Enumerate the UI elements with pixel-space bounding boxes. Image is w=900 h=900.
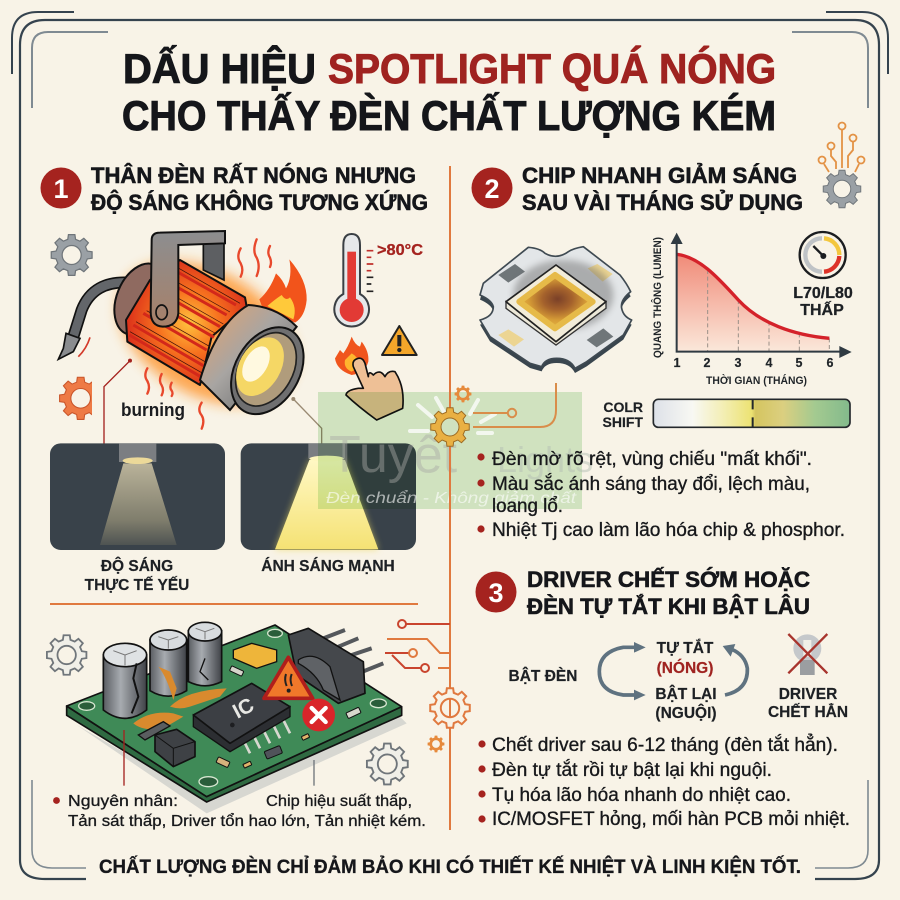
label: driver dead: CHẾT HẲN [768, 703, 848, 721]
heading 3: 3 [488, 578, 504, 608]
watermark: Lights [497, 439, 593, 480]
label: driver dead [768, 686, 848, 721]
title: DẤU HIỆU [123, 44, 316, 92]
bullets section 3 [478, 732, 850, 830]
icon: gray gear [51, 235, 92, 275]
bullets section 2: Màu sắc ánh sáng thay đổi, lệch màu, [492, 472, 810, 495]
heading 3: DRIVER CHẾT SỚM HOẶC [527, 567, 810, 592]
cycle labels [655, 639, 717, 722]
front arm [151, 231, 225, 327]
label: burning: burning [121, 400, 185, 420]
cycle labels: BẬT LẠI [655, 685, 717, 703]
icon: crossed bulb [788, 634, 827, 675]
bullets section 2: loang lổ. [492, 495, 563, 517]
small SMD parts [216, 666, 361, 768]
heading 2: CHIP NHANH GIẢM SÁNG [522, 163, 797, 188]
icon: gauge [800, 232, 846, 278]
heading 1: RẤT NÓNG [213, 163, 328, 188]
watermark [318, 392, 593, 509]
circuit traces [385, 620, 450, 672]
cycle diagram [509, 634, 848, 722]
bullets section 3: IC/MOSFET hỏng, mối hàn PCB mỏi nhiệt. [492, 808, 850, 830]
line chart: lumen decay [671, 233, 852, 358]
colour shift bar [653, 399, 850, 427]
cycle labels: TỰ TẮT [657, 639, 714, 657]
lamp cable [58, 282, 130, 359]
heat waves [145, 239, 271, 429]
label: weak brightness: THỰC TẾ YẾU [85, 577, 189, 594]
LED chip on star board [480, 247, 632, 373]
IC chip [193, 683, 290, 753]
panel: strong beam [241, 443, 416, 550]
vertical orange divider with circuit gears [431, 166, 556, 830]
title: SPOTLIGHT QUÁ NÓNG [328, 44, 776, 92]
flames [259, 259, 307, 323]
bullets section 2 [477, 448, 845, 541]
panel: section 3 driver failure [476, 567, 850, 830]
cause text: Chip hiệu suất thấp, [266, 793, 412, 810]
bullets section 3: Đèn tự tắt rồi tự bật lại khi nguội. [492, 758, 772, 781]
lamp illustration [50, 231, 417, 550]
label: weak brightness: ĐỘ SÁNG [101, 557, 173, 575]
icon: thermometer [334, 234, 373, 327]
connector block [288, 628, 383, 703]
chart axis labels: 3 [735, 356, 742, 370]
chip and chart illustrations [480, 232, 852, 427]
panel: section 1 lamp overheating [40, 163, 428, 594]
heading 1 [40, 163, 428, 215]
bullets section 3: Chết driver sau 6-12 tháng (đèn tắt hẳn). [492, 732, 838, 756]
chart axis labels [651, 237, 834, 387]
heading 2: 2 [484, 174, 500, 204]
horizontal divider [50, 603, 418, 605]
icon: hand touching flame [335, 337, 403, 420]
label: L70/L80 low [793, 285, 853, 319]
label: weak brightness [85, 557, 189, 594]
icon: red x badge [302, 699, 335, 731]
leader lines [104, 359, 322, 444]
chart axis labels: 4 [766, 356, 773, 370]
panel: weak beam [50, 443, 225, 550]
yellow component [233, 643, 277, 668]
icon: circuit gear top right [818, 122, 864, 208]
title [122, 44, 776, 139]
lamp lens [216, 314, 318, 427]
driver board illustration [47, 622, 408, 813]
heat sink fins [126, 260, 247, 385]
cause text [53, 793, 426, 830]
icon: left gear [47, 635, 86, 675]
watermark: Đèn chuẩn - Không giảm chất [326, 489, 577, 507]
chart axis labels: THỜI GIAN (THÁNG) [706, 374, 807, 387]
label: colour shift [603, 399, 643, 430]
heading 1: ĐỘ SÁNG KHÔNG TƯƠNG XỨNG [91, 190, 428, 215]
circuit board [67, 625, 407, 813]
cause text: Nguyên nhân: [68, 793, 178, 810]
cause text: Tản sát thấp, Driver tổn hao lớn, Tản nhiệt kém. [68, 813, 426, 830]
leaking capacitors [103, 622, 227, 729]
label: turn on: BẬT ĐÈN [509, 667, 577, 685]
label: strong light: ÁNH SÁNG MẠNH [261, 558, 395, 575]
chart axis labels: 5 [796, 356, 803, 370]
heading 3: ĐÈN TỰ TẮT KHI BẬT LÂU [527, 594, 810, 619]
heading 1: THÂN ĐÈN [91, 163, 205, 188]
icon: orange gear [60, 373, 105, 423]
icon: warning sign [264, 657, 313, 698]
bullets section 3: Tụ hóa lão hóa nhanh do nhiệt cao. [492, 784, 791, 806]
small inductor [138, 722, 195, 767]
icon: warning triangle [382, 326, 417, 355]
icon: outline gear and small gear [428, 688, 470, 752]
bullets section 2: Nhiệt Tj cao làm lão hóa chip & phosphor. [492, 519, 845, 541]
label: colour shift: COLR [603, 399, 643, 415]
leader lines [122, 730, 126, 786]
IC chip: IC [229, 693, 258, 723]
heading 1: 1 [53, 174, 69, 204]
label: L70/L80 low: L70/L80 [793, 285, 853, 302]
chart axis labels: 6 [827, 356, 834, 370]
heading 3 [476, 567, 810, 619]
footer conclusion: CHẤT LƯỢNG ĐÈN CHỈ ĐẢM BẢO KHI CÓ THIẾT KẾ NHIỆT VÀ LINH KIỆN TỐT. [99, 856, 801, 878]
heading 1: NHƯNG [335, 163, 416, 188]
chart axis labels: QUANG THÔNG (LUMEN) [651, 237, 664, 358]
label: L70/L80 low: THẤP [800, 300, 844, 319]
cycle arrows [599, 642, 747, 700]
title: CHO THẤY ĐÈN CHẤT LƯỢNG KÉM [122, 92, 776, 139]
heading 2 [472, 163, 803, 215]
heading 2: SAU VÀI THÁNG SỬ DỤNG [522, 190, 803, 215]
chart axis labels: 2 [704, 356, 711, 370]
label: driver dead: DRIVER [779, 686, 837, 703]
label: >80°C: >80°C [377, 242, 423, 259]
lamp barrel [200, 305, 297, 410]
chart axis labels: 1 [674, 356, 681, 370]
cycle labels: (NÓNG) [657, 659, 713, 677]
label: colour shift: SHIFT [603, 414, 643, 430]
cycle labels: (NGUỘI) [655, 704, 717, 722]
bullets section 2: Đèn mờ rõ rệt, vùng chiếu "mất khối". [492, 448, 812, 470]
back cap [104, 256, 177, 343]
back arm [203, 233, 224, 280]
watermark: Tuyêt [329, 426, 458, 484]
icon: right gear [367, 744, 408, 784]
panel: section 2 chip degradation [472, 122, 864, 541]
panel: damaged driver board [47, 620, 470, 830]
